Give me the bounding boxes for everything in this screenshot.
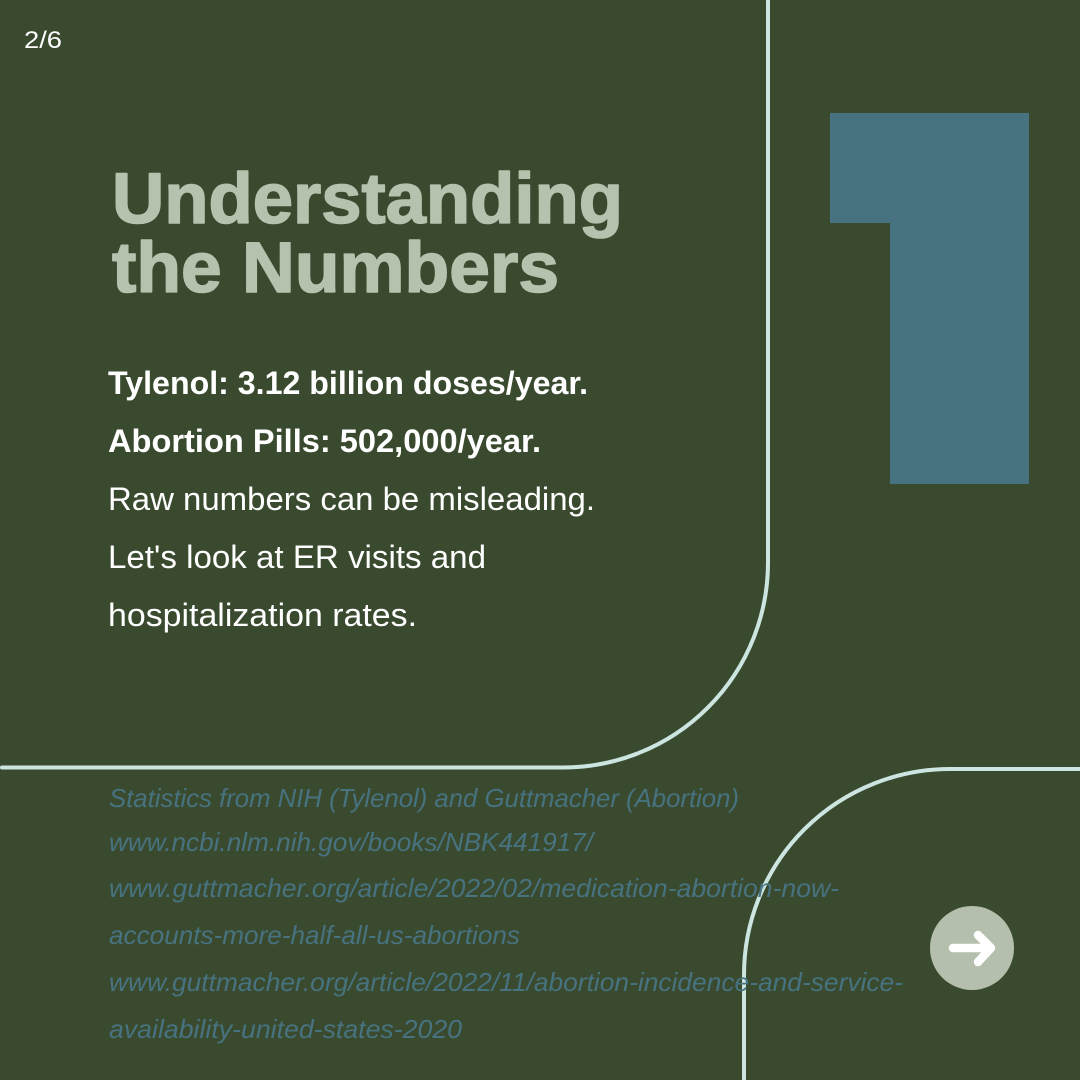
body text: Tylenol: 3.12 billion doses/year. [108,365,588,401]
title: Understanding [112,160,623,239]
body text: hospitalization rates. [108,597,417,633]
next arrow button [930,906,1014,990]
sources: www.guttmacher.org/article/2022/02/medication-abortion-now- [109,873,839,903]
body text: Abortion Pills: 502,000/year. [108,423,541,459]
body text: Let's look at ER visits and [108,539,486,575]
body text [108,365,595,633]
large numeral one shape [830,113,1029,484]
title: the Numbers [112,229,559,308]
sources: www.ncbi.nlm.nih.gov/books/NBK441917/ [109,827,596,857]
page number: 2/6 [24,27,62,54]
sources: availability-united-states-2020 [109,1014,463,1044]
title [112,160,623,308]
sources [109,783,903,1044]
rounded frame line: top left panel [2,0,768,768]
rounded frame line: bottom right panel [744,769,1080,1080]
sources: www.guttmacher.org/article/2022/11/abortion-incidence-and-service- [109,967,903,997]
body text: Raw numbers can be misleading. [108,481,595,517]
sources: accounts-more-half-all-us-abortions [109,920,520,950]
sources: Statistics from NIH (Tylenol) and Guttmacher (Abortion) [109,783,739,813]
